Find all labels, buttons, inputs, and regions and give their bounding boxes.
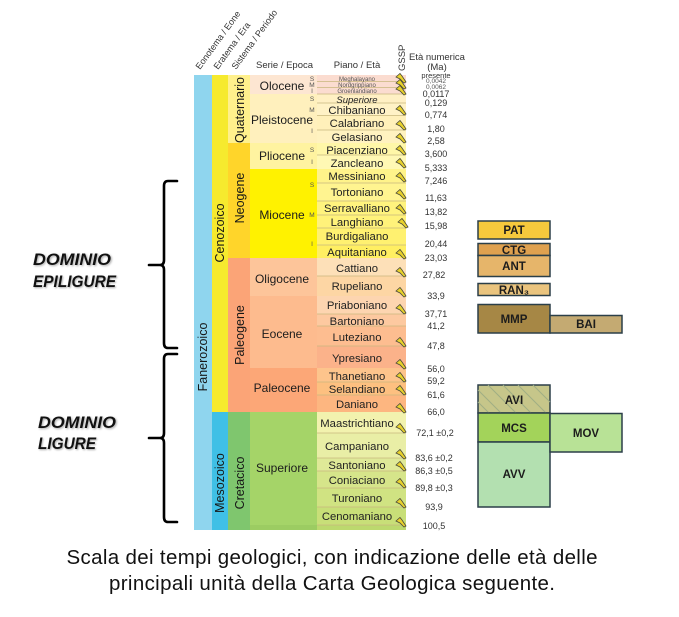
series sub-labels S M I [309, 76, 315, 248]
era column: Cenozoico [213, 203, 227, 263]
stage column: Meghalayano [339, 77, 376, 83]
numeric ages: 13,82 [425, 207, 447, 217]
series sub-labels S M I: M [309, 107, 315, 114]
caption: principali unità della Carta Geologica seguente. [109, 572, 555, 595]
caption: Scala dei tempi geologici, con indicazione delle età delle [66, 546, 598, 569]
numeric ages: 61,6 [427, 390, 445, 400]
numeric ages: presente [421, 71, 451, 80]
eon column: Fanerozoico [194, 75, 212, 530]
unit box: PAT [478, 221, 550, 239]
GSSP golden spikes [396, 74, 408, 527]
numeric ages [415, 71, 454, 531]
numeric ages: 15,98 [425, 221, 447, 231]
stage column: Serravalliano [324, 203, 390, 215]
numeric ages: 2,58 [427, 136, 445, 146]
series sub-labels S M I: I [311, 241, 313, 248]
unit box: MOV [550, 414, 622, 452]
numeric ages: 20,44 [425, 239, 447, 249]
epoch column: Miocene [259, 208, 305, 222]
numeric ages: 27,82 [423, 270, 445, 280]
label: Dominio Epiligure [33, 250, 117, 291]
numeric ages: 83,6 ±0,2 [415, 453, 453, 463]
numeric ages: 89,8 ±0,3 [415, 483, 453, 493]
period column [228, 75, 250, 530]
stage column: Ypresiano [332, 353, 382, 365]
numeric ages: 86,3 ±0,5 [415, 466, 453, 476]
numeric ages: 0,129 [425, 98, 447, 108]
stage column: Groenlandiano [337, 89, 377, 95]
unit box: BAI [550, 316, 622, 333]
stage column: Thanetiano [329, 371, 385, 383]
stage column: Calabriano [330, 118, 384, 130]
unit box: ANT [478, 256, 550, 276]
epoch column: Paleocene [254, 381, 311, 395]
label: Dominio Ligure: DOMINIO [38, 413, 116, 432]
numeric ages: 66,0 [427, 407, 445, 417]
unit box: AVI [478, 385, 550, 413]
caption [66, 546, 598, 595]
stage column: Turoniano [332, 493, 382, 505]
numeric ages: 23,03 [425, 253, 447, 263]
unit box: BAI: BAI [576, 319, 596, 331]
column headers [194, 8, 466, 73]
numeric ages: 100,5 [423, 521, 445, 531]
eon column: Fanerozoico: Fanerozoico [196, 323, 210, 391]
period column: Cretacico [233, 457, 247, 509]
stage column: Santoniano [328, 460, 386, 472]
series sub-labels S M I: I [311, 88, 313, 95]
column headers: Eratema / Era [212, 20, 252, 71]
period column: Paleogene [233, 305, 247, 365]
numeric ages: 3,600 [425, 149, 447, 159]
unit box: AVV [478, 442, 550, 507]
numeric ages: 72,1 ±0,2 [416, 428, 454, 438]
stage column [317, 75, 406, 530]
epoch column: Superiore [256, 461, 308, 475]
epoch column: Pleistocene [251, 113, 313, 127]
column headers: Piano / Età [334, 60, 381, 71]
stage column: Tortoniano [331, 187, 383, 199]
series sub-labels S M I: S [310, 182, 315, 189]
series sub-labels S M I: S [310, 147, 315, 154]
epoch column [250, 75, 317, 530]
unit box: AVI: AVI [505, 395, 523, 407]
unit box: ANT: ANT [502, 261, 526, 273]
stage column: Campaniano [325, 441, 389, 453]
stage column: Aquitaniano [327, 247, 387, 259]
column headers: Serie / Epoca [256, 60, 314, 71]
stage column: Gelasiano [332, 132, 382, 144]
epoch column: Eocene [262, 327, 303, 341]
stage column: Superiore [336, 95, 378, 106]
unit box: PAT: PAT [503, 225, 525, 237]
numeric ages: 93,9 [425, 502, 443, 512]
numeric ages: 47,8 [427, 341, 445, 351]
era column: Mesozoico [213, 453, 227, 513]
stage column: Nordgrippiano [338, 83, 377, 89]
numeric ages: 1,80 [427, 124, 445, 134]
unit box: RAN3 [478, 284, 550, 297]
numeric ages: 59,2 [427, 376, 445, 386]
stage column: Rupeliano [332, 281, 382, 293]
column headers: (Ma) [427, 62, 447, 73]
unit box: MCS: MCS [501, 423, 527, 435]
unit box: MOV: MOV [573, 428, 599, 440]
column headers: Sistema / Periodo [230, 8, 279, 71]
unit box: MMP: MMP [501, 314, 528, 326]
numeric ages: 56,0 [427, 364, 445, 374]
series sub-labels S M I: I [311, 128, 313, 135]
epoch column: Oligocene [255, 272, 309, 286]
column headers: GSSP [397, 45, 408, 71]
numeric ages: 0,774 [425, 110, 447, 120]
numeric ages: 37,71 [425, 309, 447, 319]
stage column: Selandiano [329, 384, 385, 396]
stage column: Coniaciano [329, 475, 385, 487]
series sub-labels S M I: M [309, 212, 315, 219]
label: Dominio Ligure: LIGURE [38, 434, 97, 453]
series sub-labels S M I: M [309, 82, 315, 89]
unit box: AVV: AVV [503, 469, 526, 481]
column headers: Eonotema / Eone [194, 9, 243, 71]
stage column: Langhiano [331, 217, 383, 229]
numeric ages: 5,333 [425, 163, 447, 173]
stage column: Piacenziano [326, 145, 388, 157]
label: Dominio Epiligure: DOMINIO [33, 250, 111, 269]
stage column: Bartoniano [330, 316, 384, 328]
column headers: Età numerica [409, 52, 466, 63]
stage column: Maastrichtiano [320, 418, 394, 430]
brace: Dominio Epiligure [149, 181, 177, 348]
stage column: Messiniano [328, 171, 386, 183]
numeric ages: 0,0062 [426, 84, 446, 91]
unit box: CTG: CTG [502, 245, 526, 257]
stage column: Daniano [336, 399, 378, 411]
numeric ages: 41,2 [427, 321, 445, 331]
label: Dominio Epiligure: EPILIGURE [33, 272, 117, 291]
series sub-labels S M I: I [311, 159, 313, 166]
series sub-labels S M I: S [310, 76, 315, 83]
unit box: MMP [478, 304, 550, 333]
period column: Neogene [233, 173, 247, 223]
stage column: Luteziano [332, 332, 382, 344]
stage column: Zancleano [331, 158, 383, 170]
numeric ages: 7,246 [425, 176, 447, 186]
stage column: Burdigaliano [326, 231, 388, 243]
series sub-labels S M I: S [310, 96, 315, 103]
numeric ages: 0,0042 [426, 78, 446, 85]
epoch column: Pliocene [259, 149, 305, 163]
stage column: Chibaniano [328, 105, 386, 117]
stage column: Cenomaniano [322, 511, 392, 523]
stage column: Priaboniano [327, 300, 387, 312]
epoch column: Olocene [260, 79, 305, 93]
unit box: RAN3: RAN₃ [499, 285, 529, 297]
numeric ages: 11,63 [425, 193, 447, 203]
numeric ages: 0,0117 [423, 89, 449, 99]
period column: Quaternario [233, 77, 247, 143]
label: Dominio Ligure [38, 413, 116, 453]
numeric ages: 33,9 [427, 291, 445, 301]
brace: Dominio Ligure [149, 354, 177, 522]
stage column: Cattiano [336, 263, 378, 275]
unit box: MCS [478, 413, 550, 442]
unit box: CTG [478, 244, 550, 257]
era column [212, 75, 228, 530]
